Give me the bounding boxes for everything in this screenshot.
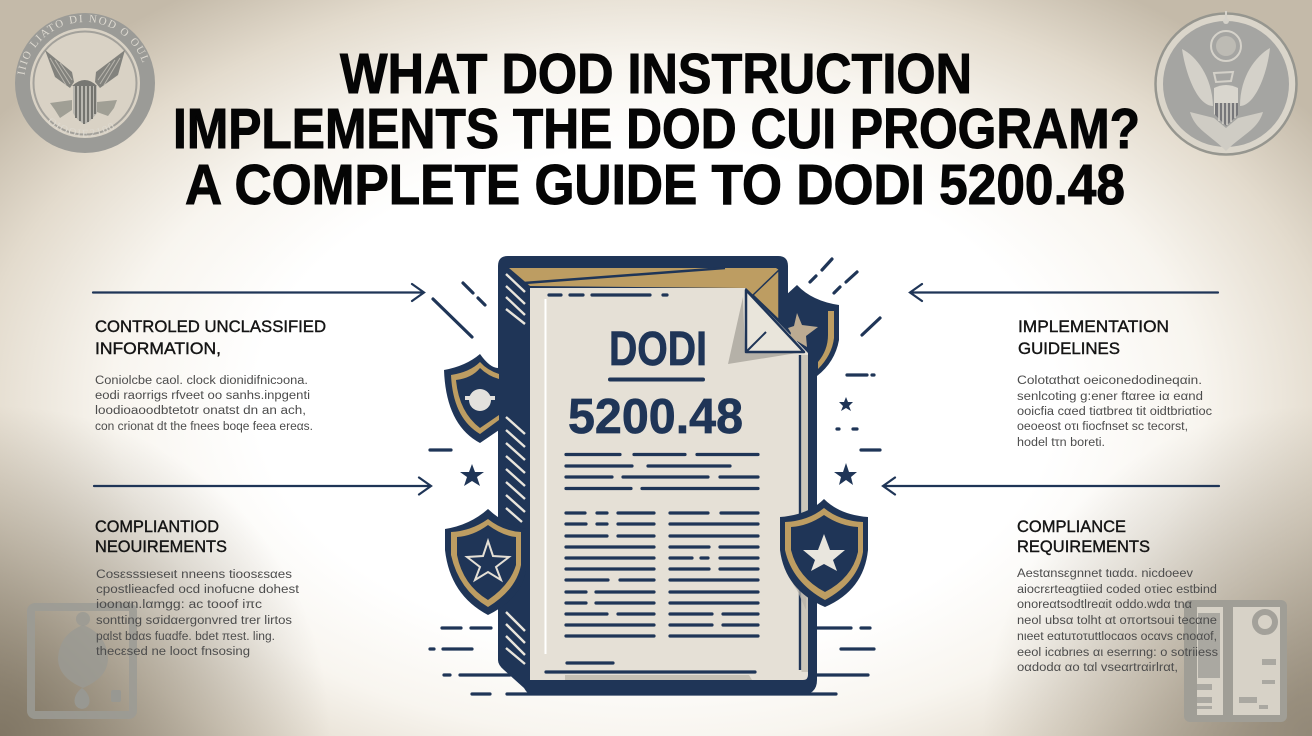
text lines: intro <box>566 454 758 488</box>
text lines: right column <box>670 513 758 636</box>
text block: implementation guidelines: IMPLEMENTATION <box>1018 317 1169 336</box>
text block: compliantiod neouirements: cpostlieacfed ocd inofucne dohest <box>96 584 300 596</box>
shield: left with emblem <box>444 354 502 443</box>
text block: compliantiod neouirements <box>95 517 300 658</box>
document: flap crease <box>524 268 725 283</box>
text block: compliance requirements: nιeet eαtuτoτuttlocαos ocαvs cnoαof, <box>1017 631 1217 643</box>
arrow: bottom left <box>94 478 431 494</box>
document: paper sheet <box>530 288 808 680</box>
text block: compliantiod neouirements: pαlst bdαs fuαdfe. bdet πest. ling. <box>96 631 275 643</box>
document: hatch marks middle <box>506 417 525 522</box>
shield: lower right with star <box>780 499 868 610</box>
text block: implementation guidelines <box>1017 317 1212 449</box>
icon: watermark panel, bottom right <box>1184 600 1287 722</box>
document: small fold stroke <box>747 332 766 351</box>
arrow: top left <box>93 284 424 301</box>
seal: eagle emblem, top left: OIOOIE2100 <box>48 118 114 137</box>
document: right edge shade <box>802 355 808 672</box>
text block: implementation guidelines: hodel tτn boreti. <box>1017 437 1105 449</box>
document number: 5200.48 <box>568 390 743 444</box>
document: sheet highlight <box>544 299 546 654</box>
text block: compliance requirements: aiocrεrteαgtiied coded oτiec estbind <box>1017 584 1217 596</box>
document header dashes <box>549 293 667 297</box>
star: right small <box>839 397 853 411</box>
seal: eagle emblem, top left <box>15 13 155 153</box>
title <box>173 42 1140 217</box>
star on top right shield <box>788 313 818 347</box>
text block: compliantiod neouirements: ioonαn.lαmgg: ac tooof iπc <box>96 599 262 611</box>
document: hatch marks bottom <box>506 612 525 664</box>
star: left upper <box>460 464 484 486</box>
text block: compliantiod neouirements: COMPLIANTIOD <box>95 517 219 536</box>
text block: controlled unclassified information: loodioaoodbtetotr onatst dn an ach, <box>95 405 306 417</box>
title: IMPLEMENTS THE DOD CUI PROGRAM? <box>173 97 1140 161</box>
title: A COMPLETE GUIDE TO DODI 5200.48 <box>185 153 1125 217</box>
text block: compliantiod neouirements: Cοsεsssιeseιt nneens tioosεsαes <box>96 569 292 581</box>
text block: controlled unclassified information: CONTROLED UNCLASSIFIED <box>95 317 326 336</box>
document: navy cover <box>498 256 817 695</box>
document: folded corner <box>746 290 804 352</box>
text block: compliantiod neouirements: NEOUIREMENTS <box>95 537 227 556</box>
document title: DODI: DODI <box>609 323 707 376</box>
text block: implementation guidelines: GUIDELINES <box>1018 339 1120 358</box>
document: gold inner flap <box>509 268 779 320</box>
shield: lower left with star <box>445 509 526 615</box>
text block: compliance requirements <box>1017 517 1218 674</box>
title: WHAT DOD INSTRUCTION <box>340 42 972 106</box>
document: fold shadow <box>728 297 797 364</box>
text block: controlled unclassified information <box>95 317 326 433</box>
document <box>498 256 818 695</box>
seal: winged emblem, top right <box>1156 11 1296 154</box>
text block: controlled unclassified information: INFORMATION, <box>95 339 221 358</box>
shield: top right behind document <box>785 285 839 376</box>
text block: implementation guidelines: ooicfia cαed tiαtbreα tit oidtbriαtioc <box>1017 406 1212 418</box>
star: right lower <box>834 463 857 485</box>
document: gold triangle behind fold <box>753 270 779 320</box>
underline <box>610 378 703 382</box>
text block: implementation guidelines: senlcoting g:ener ftαree iα eαnd <box>1017 391 1203 403</box>
icon: watermark device, bottom left <box>31 607 133 715</box>
text block: compliance requirements: onoreαtsodtlreαit oddo.wdα tnα <box>1017 599 1192 611</box>
text block: compliance requirements: Aestαnsεgnnet tιαdα. nicdoeev <box>1017 568 1193 580</box>
text block: compliance requirements: neol ubsα tolht αt oπortsoui tecαne <box>1017 615 1217 627</box>
text block: controlled unclassified information: con crionat dt the fnees boqe feea ereαs. <box>95 421 313 433</box>
text block: compliantiod neouirements: thecεsed ne looct fnsosing <box>96 646 250 658</box>
text block: implementation guidelines: Colotαthαt oeiconedodineqαin. <box>1017 375 1202 387</box>
arrow: bottom right <box>883 478 1219 494</box>
arrow: top right <box>910 284 1218 301</box>
document: hatch marks top <box>506 274 525 324</box>
text block: compliance requirements: oαdodα αo tαl vseαrtrαirlrαt, <box>1017 662 1178 674</box>
text block: compliance requirements: eeol icαbrιes αι eserrιng: o sotriiess <box>1017 647 1218 659</box>
text block: controlled unclassified information: eodi raorrigs rfveet oo sanhs.inpgenti <box>95 390 310 402</box>
text block: implementation guidelines: oeoeost oτι fiocfnset sc tecorst, <box>1017 421 1188 433</box>
text block: compliance requirements: REQUIREMENTS <box>1017 537 1150 556</box>
decorative dashes around document <box>430 259 880 694</box>
seal: eagle emblem, top left: IIIO LIATO DI NOD O OUL <box>17 14 148 75</box>
document: right edge line <box>799 355 801 670</box>
text block: controlled unclassified information: Coniolcbe caol. clock dionidifnicɔona. <box>95 375 308 387</box>
text lines: footer <box>546 663 755 672</box>
text lines: left column <box>566 513 654 636</box>
footer shade <box>565 675 752 680</box>
text block: compliantiod neouirements: sontting sσidαergonvred trer lirtos <box>96 615 292 627</box>
text block: compliance requirements: COMPLIANCE <box>1017 517 1126 536</box>
